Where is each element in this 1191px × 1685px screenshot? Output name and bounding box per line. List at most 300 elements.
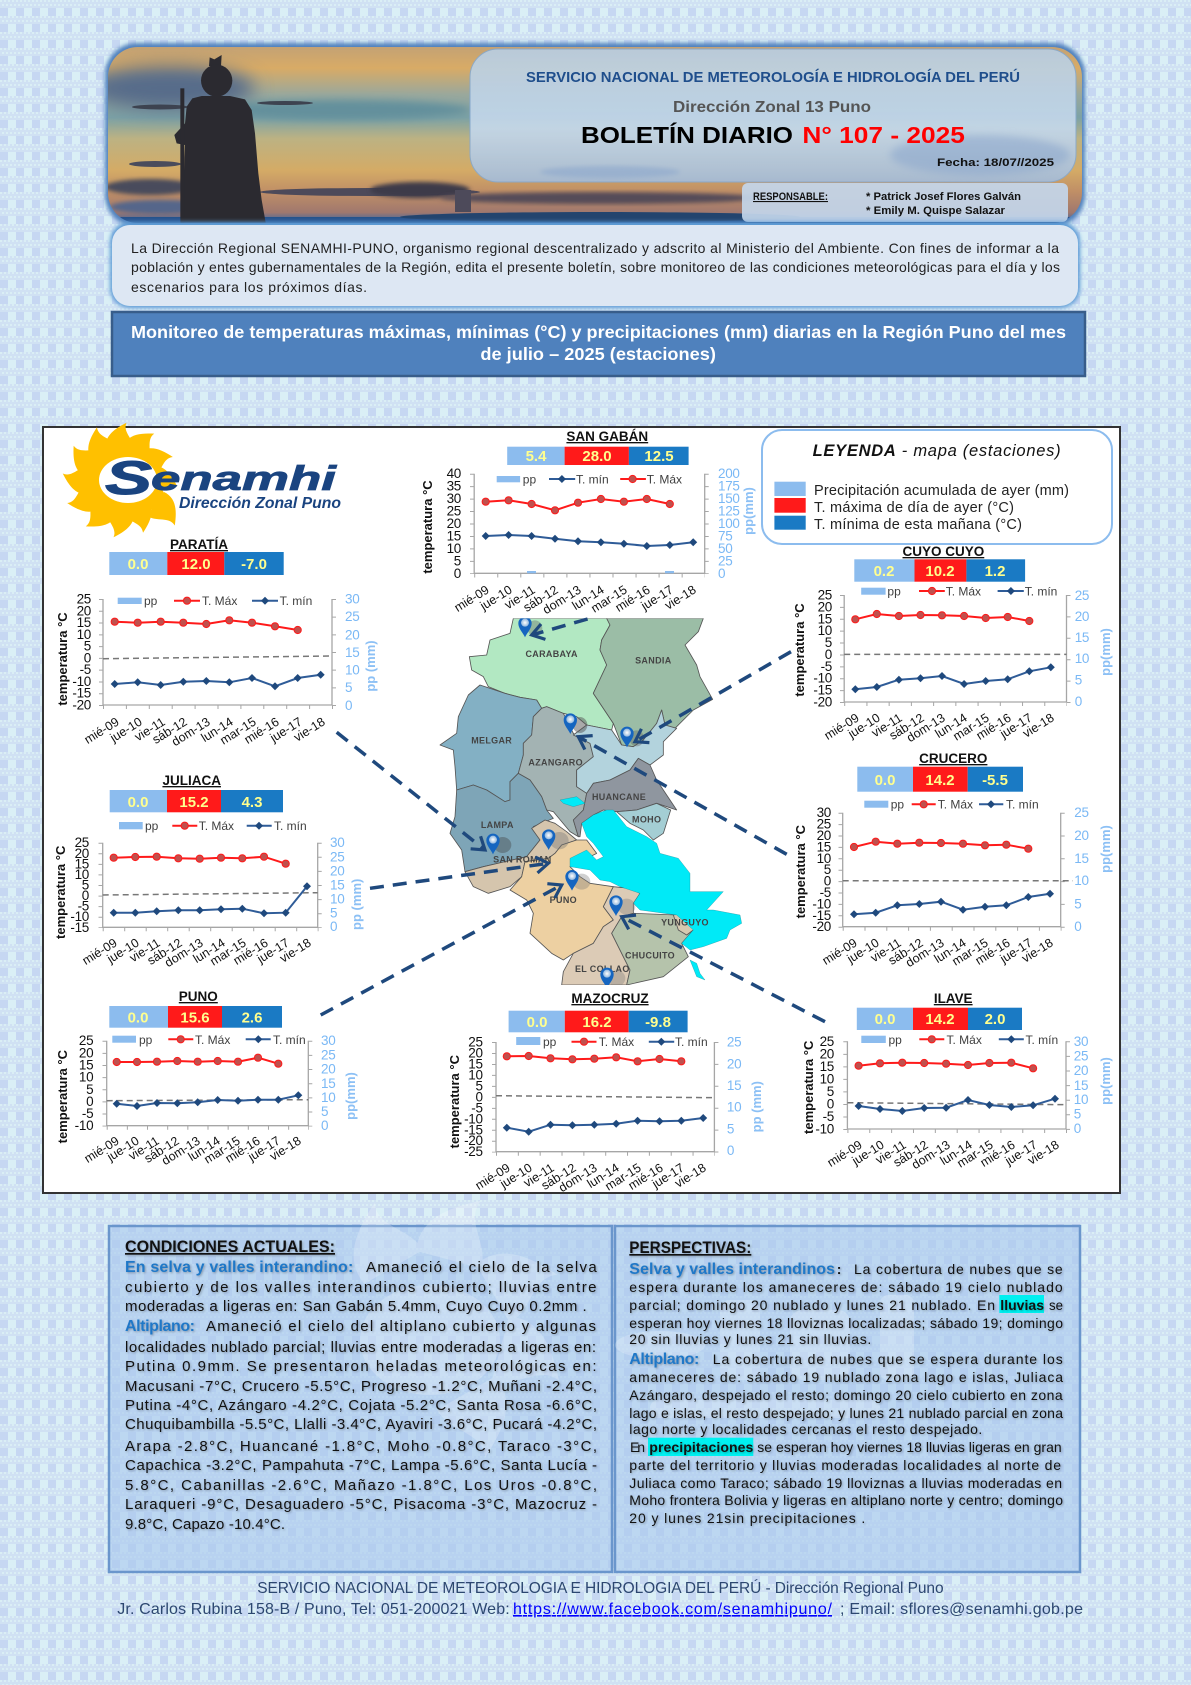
chart: Mazocruz: MAZOCRUZ <box>571 991 649 1006</box>
chart: San Gabán: 150 <box>718 491 740 506</box>
chart: Mazocruz: 15 <box>468 1056 483 1071</box>
chart: Crucero: 10 <box>817 851 831 866</box>
chart: Puno: dom-13 <box>159 1134 203 1168</box>
chart: Cuyo Cuyo: jue-10 <box>845 711 883 741</box>
chart: Paratía: pp (mm) <box>363 640 378 692</box>
chart: Mazocruz: -25 <box>464 1144 483 1159</box>
chart: Cuyo Cuyo: sáb-12 <box>887 711 927 743</box>
chart: Juliaca: mié-16 <box>231 936 271 968</box>
logo: Senamhi sun: enamhi <box>151 460 338 498</box>
chart: Ilave: -10 <box>815 1122 834 1136</box>
chart: Ilave: T. Máx <box>946 1033 982 1047</box>
chart: Mazocruz: 10 <box>727 1100 741 1114</box>
values: Paratía <box>109 552 284 575</box>
chart: Juliaca: T. mín <box>274 819 307 833</box>
chart: Crucero: 15 <box>817 839 831 854</box>
perspectivas text: 20 y lunes 21sin precipitaciones . <box>629 1510 865 1526</box>
section banner: de julio – 2025 (estaciones) <box>480 344 716 364</box>
chart: Paratía: mié-16 <box>242 715 282 747</box>
province labels: PUNO <box>550 895 577 905</box>
perspectivas text: Azángaro, despejado el resto; domingo 20 cielo cubierto en zona <box>629 1387 1063 1403</box>
chart: Ilave: dom-13 <box>909 1138 953 1172</box>
chart: Crucero: T. mín <box>1006 798 1039 812</box>
chart: Paratía: 10 <box>345 662 359 678</box>
chart: Cuyo Cuyo: mié-16 <box>974 711 1014 743</box>
chart: San Gabán: 25 <box>447 504 461 518</box>
legend box: LEYENDA - mapa (estaciones) <box>813 442 1061 460</box>
chart: Puno: 0 <box>86 1094 93 1109</box>
chart: Paratía: 5 <box>84 639 91 654</box>
chart: Ilave: mar-15 <box>955 1138 996 1171</box>
arrow: Puno to pin <box>321 885 562 1015</box>
chart: Mazocruz: 25 <box>468 1034 483 1050</box>
responsable box: * Patrick Josef Flores Galván <box>866 191 1021 203</box>
chart: Crucero: lun-14 <box>932 936 969 966</box>
chart: San Gabán: 10 <box>447 541 461 556</box>
intro text box: La Dirección Regional SENAMHI-PUNO, organismo regional descentralizado y adscrito al Ministerio del Ambiente. Con fines de informar a la <box>131 240 1059 256</box>
chart: Ilave: 15 <box>1074 1078 1088 1093</box>
condiciones text: moderadas a ligeras en: San Gabán 5.4mm, Cuyo Cuyo 0.2mm . <box>125 1298 587 1315</box>
perspectivas text: se <box>1049 1297 1063 1313</box>
chart: Crucero: dom-13 <box>903 936 947 970</box>
chart: Cuyo Cuyo: mié-09 <box>822 711 862 743</box>
chart: Mazocruz: T. mín <box>675 1035 708 1049</box>
chart: Paratía: -15 <box>72 686 91 701</box>
chart: San Gabán: mar-15 <box>589 583 630 616</box>
chart: San Gabán: pp <box>523 472 536 486</box>
perspectivas text: Altiplano: <box>629 1351 699 1368</box>
chart: Cuyo Cuyo: jue-17 <box>997 711 1035 741</box>
perspectivas text: se esperan hoy viernes 18 lluvias ligeras en gran <box>757 1439 1062 1455</box>
responsable box: * Emily M. Quispe Salazar <box>866 205 1006 217</box>
chart: Puno: 10 <box>321 1090 335 1105</box>
condiciones text: Laraqueri -9°C, Desaguadero -5°C, Pisacoma -3°C, Mazocruz - <box>125 1496 597 1513</box>
chart: Paratía: T. mín <box>280 594 312 608</box>
perspectivas text: Moho frontera Bolivia y ligeras en altiplano norte y centro; domingo <box>629 1492 1063 1508</box>
chart: San Gabán: 0 <box>718 566 725 581</box>
chart: Cuyo Cuyo: lun-14 <box>933 711 970 741</box>
intro text box: escenarios para los próximos días. <box>131 279 367 295</box>
chart: Juliaca: 30 <box>330 835 344 850</box>
values: Crucero: -5.5 <box>982 772 1008 789</box>
chart: San Gabán: 20 <box>447 516 461 531</box>
chart: Mazocruz: pp (mm) <box>749 1081 764 1132</box>
chart: San Gabán: temperatura °C <box>420 480 435 574</box>
chart: Puno: vie-18 <box>267 1134 304 1164</box>
chart: Puno: 10 <box>79 1070 93 1085</box>
chart: Juliaca: mié-09 <box>80 936 120 968</box>
chart: Ilave: 15 <box>820 1059 834 1074</box>
chart: Paratía: mar-15 <box>218 715 259 748</box>
province labels: AZANGARO <box>528 758 583 768</box>
chart: San Gabán: jue-17 <box>638 583 676 613</box>
chart: Ilave: 10 <box>1074 1092 1088 1107</box>
chart: Ilave: mié-09 <box>825 1138 865 1170</box>
condiciones text: Putina -4°C, Azángaro -4.2°C, Cojata -5.2°C, Santa Rosa -6.6°C, <box>125 1397 597 1414</box>
values: Ilave <box>857 1008 1022 1030</box>
condiciones text: Altiplano: <box>125 1318 195 1335</box>
chart: Ilave: 25 <box>820 1034 834 1049</box>
chart: Ilave: 25 <box>1074 1048 1088 1064</box>
chart: Ilave: -5 <box>823 1109 834 1124</box>
condiciones text: 5.8°C, Cabanillas -2.6°C, Mañazo -1.8°C, Los Uros -0.8°C, <box>125 1477 597 1494</box>
chart: Juliaca: pp (mm) <box>349 879 364 930</box>
chart: Mazocruz: 5 <box>727 1122 734 1136</box>
chart: Paratía: 20 <box>77 603 91 618</box>
condiciones text: Amaneció el cielo del altiplano cubierto y algunas <box>206 1318 596 1335</box>
chart: Puno: sáb-12 <box>142 1134 182 1166</box>
chart: Puno: -5 <box>82 1106 93 1121</box>
perspectivas text: amaneceres de: sábado 19 nublado zona lago e islas, Juliaca <box>629 1369 1063 1385</box>
chart: Puno <box>55 989 358 1168</box>
chart: Paratía: 5 <box>345 680 352 695</box>
chart: Paratía: 15 <box>345 645 359 660</box>
chart: Paratía: vie-11 <box>132 715 168 744</box>
chart: Mazocruz: pp <box>543 1035 557 1049</box>
chart: San Gabán: jue-10 <box>477 583 515 613</box>
chart: Ilave: T. mín <box>1026 1033 1058 1047</box>
chart: Mazocruz: mié-09 <box>473 1161 513 1193</box>
values: Cuyo Cuyo: 0.2 <box>874 563 894 580</box>
perspectivas text: esperan hoy viernes 18 lloviznas localizadas; sábado 19; domingo <box>629 1315 1063 1331</box>
chart: Mazocruz: 15 <box>727 1078 741 1093</box>
chart: San Gabán: 15 <box>447 528 461 544</box>
header title panel: BOLETÍN DIARIO <box>581 121 793 148</box>
chart: San Gabán: 0 <box>454 566 461 581</box>
chart: San Gabán: lun-14 <box>570 583 607 613</box>
perspectivas text: lago norte y localidades cercanas el resto despejado. <box>629 1421 982 1437</box>
chart: Paratía: jue-17 <box>267 715 305 745</box>
lake Titicaca <box>560 797 742 980</box>
chart: Crucero: 5 <box>824 862 831 877</box>
chart: Juliaca: 25 <box>75 835 89 850</box>
chart: San Gabán: vie-18 <box>662 583 699 613</box>
chart: Ilave: 5 <box>1074 1106 1081 1122</box>
chart: Puno: pp <box>139 1033 153 1047</box>
logo: Senamhi sun <box>63 423 341 537</box>
chart: San Gabán: 5 <box>454 553 461 568</box>
perspectivas text <box>629 1239 1063 1526</box>
chart: Ilave: jue-17 <box>1002 1138 1040 1168</box>
values: Paratía: -7.0 <box>241 556 267 573</box>
chart: Ilave: 0 <box>1074 1121 1081 1136</box>
chart: Juliaca: 10 <box>330 892 344 906</box>
legend box <box>762 430 1112 544</box>
chart: San Gabán: vie-11 <box>502 583 538 612</box>
chart: Crucero: 0 <box>1074 919 1082 934</box>
chart: Puno: T. mín <box>273 1033 306 1047</box>
chart: Ilave: ILAVE <box>934 991 973 1006</box>
chart: Cuyo Cuyo: 25 <box>1075 588 1089 603</box>
values: San Gabán: 12.5 <box>644 448 674 465</box>
chart: Juliaca: -15 <box>70 920 89 935</box>
cyan highlights <box>648 1295 1044 1456</box>
values: Juliaca: 0.0 <box>128 794 148 811</box>
chart: Cuyo Cuyo: -10 <box>813 671 832 686</box>
chart: Juliaca: sáb-12 <box>145 936 185 968</box>
chart: Cuyo Cuyo: CUYO CUYO <box>903 544 984 559</box>
chart: Cuyo Cuyo <box>792 544 1113 745</box>
chart: Paratía: 0 <box>345 698 352 713</box>
chart: Paratía: 0 <box>84 650 91 665</box>
chart: Paratía: 25 <box>345 609 359 624</box>
chart: Cuyo Cuyo: 15 <box>818 611 832 626</box>
values: Paratía: 12.0 <box>181 556 211 573</box>
footer <box>117 1580 1083 1618</box>
chart: Puno: 25 <box>321 1048 335 1062</box>
intro text box <box>110 222 1080 308</box>
chart: Ilave: 20 <box>820 1046 834 1061</box>
chart: Paratía: vie-18 <box>291 715 328 745</box>
chart: Mazocruz: jue-17 <box>649 1161 687 1191</box>
chart: Paratía: mié-09 <box>82 715 122 747</box>
chart: Crucero: pp <box>891 798 904 812</box>
chart: Paratía: lun-14 <box>199 715 236 745</box>
perspectivas text: espera durante los amaneceres de: sábado 19 cielo nublado <box>629 1279 1063 1295</box>
chart: Crucero: 30 <box>817 805 831 820</box>
chart: Cuyo Cuyo: pp(mm) <box>1098 628 1113 676</box>
chart: Crucero: -5 <box>820 885 831 900</box>
chart: Mazocruz: 10 <box>468 1067 483 1082</box>
chart: Mazocruz: -10 <box>464 1111 483 1126</box>
condiciones text: 9.8°C, Capazo -10.4°C. <box>125 1516 285 1533</box>
chart: Ilave: jue-10 <box>849 1138 887 1168</box>
arrow: Juliaca to pin <box>370 863 548 888</box>
perspectivas text: parte del territorio y lluvias moderadas localidades al norte de <box>629 1457 1061 1473</box>
chart: Juliaca: 10 <box>75 867 89 882</box>
values: Paratía: 0.0 <box>128 556 148 573</box>
province labels: MELGAR <box>471 736 512 746</box>
condiciones text: localidades nublado parcial; lluvias entre moderadas a ligeras en: <box>125 1339 596 1356</box>
chart: Puno: 5 <box>86 1082 93 1097</box>
legend box: T. mínima de esta mañana (°C) <box>814 517 1022 533</box>
chart: Juliaca: 5 <box>330 906 337 920</box>
footer: Jr. Carlos Rubina 158-B / Puno, Tel: 051-200021 Web: <box>117 1601 510 1618</box>
arrow: Crucero to pin <box>578 737 787 854</box>
panel watermark <box>331 1188 572 1466</box>
province labels: CHUCUITO <box>625 951 675 961</box>
chart: Cuyo Cuyo: vie-18 <box>1020 711 1057 741</box>
chart: Crucero: mié-16 <box>973 936 1013 968</box>
perspectivas watermark <box>615 1295 914 1418</box>
chart: Crucero: CRUCERO <box>919 751 987 766</box>
chart: Paratía: -10 <box>72 674 91 689</box>
chart: Crucero: sáb-12 <box>886 936 926 968</box>
chart: Crucero: pp(mm) <box>1098 825 1113 873</box>
header title panel <box>470 49 1076 182</box>
header sunset photo <box>85 47 1082 223</box>
chart: Cuyo Cuyo: -15 <box>813 683 832 698</box>
chart: Mazocruz: mié-16 <box>626 1161 666 1193</box>
chart: San Gabán: 30 <box>447 491 461 506</box>
chart: Mazocruz: T. Máx <box>599 1035 634 1049</box>
province labels: SANDIA <box>635 656 672 666</box>
header title panel: Dirección Zonal 13 Puno <box>673 99 871 116</box>
intro text box: población y entes gubernamentales de la Región, edita el presente boletín, sobre monitoreo de las condiciones meteorológicas para el día y los <box>131 259 1060 275</box>
chart: Crucero: 25 <box>817 817 831 832</box>
chart: Ilave: 0 <box>827 1096 834 1112</box>
chart: Juliaca: temperatura °C <box>53 845 68 939</box>
logo: Senamhi sun: S <box>105 451 152 504</box>
chart: Juliaca <box>53 773 364 970</box>
perspectivas text: La cobertura de nubes que se <box>854 1261 1063 1277</box>
chart: Crucero: 15 <box>1074 851 1089 866</box>
perspectivas text: : <box>837 1261 841 1277</box>
chart: Ilave: 30 <box>1074 1034 1088 1049</box>
condiciones text: CONDICIONES ACTUALES: <box>125 1237 335 1256</box>
header title panel: SERVICIO NACIONAL DE METEOROLOGÍA E HIDROLOGÍA DEL PERÚ <box>526 68 1020 86</box>
perspectivas text: 20 sin lluvias y lunes 21 sin lluvias. <box>629 1331 871 1347</box>
chart: Crucero: 25 <box>1074 805 1089 820</box>
chart: Puno: mar-15 <box>202 1134 243 1167</box>
chart: Crucero: -10 <box>812 896 831 911</box>
chart: Cuyo Cuyo: -5 <box>821 659 832 674</box>
chart: San Gabán: pp(mm) <box>741 487 756 535</box>
chart: Crucero: 10 <box>1074 873 1089 888</box>
logo: Senamhi sun: Dirección Zonal Puno <box>179 495 341 512</box>
chart: Cuyo Cuyo: T. Máx <box>946 584 981 598</box>
chart: Cuyo Cuyo: -20 <box>813 694 832 710</box>
responsable box: RESPONSABLE: <box>753 191 828 203</box>
chart: San Gabán: mié-16 <box>613 583 653 615</box>
panel: condiciones actuales <box>109 1188 612 1572</box>
chart: Juliaca: T. Máx <box>199 819 234 833</box>
province labels: HUANCANE <box>592 792 646 802</box>
chart: Juliaca: 5 <box>82 878 89 892</box>
chart: Cuyo Cuyo: dom-13 <box>904 711 948 745</box>
chart: Puno: T. Máx <box>195 1033 230 1047</box>
chart: Juliaca: jue-10 <box>104 936 142 966</box>
chart: Ilave: 5 <box>827 1084 834 1099</box>
chart: Juliaca: mar-15 <box>208 936 249 969</box>
chart: Cuyo Cuyo: temperatura °C <box>792 603 807 697</box>
chart: Crucero: -15 <box>812 908 831 923</box>
chart: San Gabán: 175 <box>718 479 740 494</box>
chart: Puno: pp(mm) <box>343 1072 358 1120</box>
chart: Mazocruz: 0 <box>727 1143 734 1158</box>
main monitoring panel <box>43 427 1120 1193</box>
chart: Crucero: vie-11 <box>868 936 904 965</box>
chart: Cuyo Cuyo: vie-11 <box>869 711 905 740</box>
chart: Mazocruz <box>447 991 764 1195</box>
chart: Crucero: T. Máx <box>938 798 973 812</box>
province labels: SAN ROMAN <box>493 854 552 864</box>
values: Juliaca: 4.3 <box>242 794 262 811</box>
values: Mazocruz <box>509 1011 688 1032</box>
chart: Juliaca: jue-17 <box>254 936 292 966</box>
chart: Puno: vie-11 <box>126 1134 162 1163</box>
arrow: San Gabán to pin <box>532 619 588 635</box>
chart: Juliaca: -10 <box>70 909 89 924</box>
chart: Juliaca: vie-18 <box>277 936 314 966</box>
condiciones text: Chuquibambilla -5.5°C, Llalli -3.4°C, Ayaviri -3.6°C, Pucará -4.2°C, <box>125 1416 597 1433</box>
chart: Paratía: -5 <box>80 662 91 677</box>
chart: Mazocruz: jue-10 <box>497 1161 535 1191</box>
chart: Cuyo Cuyo: 20 <box>1075 609 1089 624</box>
chart: Juliaca: 20 <box>75 846 89 861</box>
chart: Ilave: vie-11 <box>873 1138 909 1167</box>
header title panel: N° 107 - 2025 <box>802 122 965 148</box>
chart: Crucero: 20 <box>1074 828 1089 843</box>
chart: San Gabán: 125 <box>718 504 740 518</box>
chart: San Gabán: 50 <box>718 541 732 556</box>
chart: Puno: -10 <box>75 1118 93 1133</box>
condiciones text: Capachica -3.2°C, Pampahuta -7°C, Lampa -5.6°C, Santa Lucía - <box>125 1457 597 1474</box>
chart: Paratía: 25 <box>77 592 91 606</box>
chart: Puno: 15 <box>321 1076 335 1091</box>
chart: Cuyo Cuyo: T. mín <box>1025 584 1057 598</box>
chart: Paratía: 20 <box>345 628 359 642</box>
chart: San Gabán: sáb-12 <box>521 583 561 615</box>
values: San Gabán <box>507 447 689 465</box>
chart: Juliaca: 20 <box>330 864 344 878</box>
chart: Paratía: dom-13 <box>169 715 213 749</box>
provinces <box>440 618 713 985</box>
chart: Crucero: temperatura °C <box>793 824 808 918</box>
chart: Juliaca: dom-13 <box>162 936 206 970</box>
header title panel: Fecha: 18/07//2025 <box>937 157 1054 169</box>
values: Cuyo Cuyo: 1.2 <box>985 563 1005 580</box>
station pins <box>486 617 644 988</box>
values: Mazocruz: 16.2 <box>582 1014 612 1031</box>
values: Puno: 15.6 <box>180 1010 210 1026</box>
chart: Ilave: pp <box>888 1033 902 1047</box>
chart: Juliaca: lun-14 <box>191 936 228 966</box>
chart: Mazocruz: -20 <box>464 1133 483 1148</box>
chart: Mazocruz: 5 <box>475 1078 483 1093</box>
chart: Mazocruz: 0 <box>475 1089 483 1104</box>
chart: Crucero: jue-10 <box>844 936 882 966</box>
province labels <box>471 649 709 974</box>
chart: San Gabán: mié-09 <box>452 583 492 615</box>
chart: Crucero: 0 <box>824 874 831 889</box>
chart: Juliaca: 0 <box>330 919 337 934</box>
section banner <box>112 312 1085 376</box>
chart: Puno: 15 <box>79 1058 93 1072</box>
chart: Cuyo Cuyo: mar-15 <box>951 711 992 744</box>
chart: Cuyo Cuyo: 5 <box>1075 672 1082 688</box>
chart: Mazocruz: dom-13 <box>556 1161 600 1195</box>
perspectivas text: precipitaciones <box>649 1439 754 1455</box>
values: San Gabán: 28.0 <box>582 448 612 465</box>
header banner <box>85 43 1085 227</box>
values: Mazocruz: -9.8 <box>645 1014 671 1031</box>
chart: Cuyo Cuyo: 10 <box>1075 651 1089 666</box>
chart: Paratía: PARATÍA <box>170 537 228 552</box>
condiciones text: cubierto y de los valles interandinos cubierto; lluvias entre <box>125 1279 596 1296</box>
footer: SERVICIO NACIONAL DE METEOROLOGIA E HIDROLOGIA DEL PERÚ - Dirección Regional Puno <box>257 1580 944 1597</box>
values: San Gabán: 5.4 <box>526 448 547 465</box>
chart: Paratía: sáb-12 <box>150 715 190 747</box>
map: Región Puno provinces <box>440 617 742 988</box>
chart: Puno: mié-16 <box>223 1134 263 1166</box>
values: Cuyo Cuyo <box>854 559 1025 582</box>
province labels: MOHO <box>632 814 661 824</box>
chart: Paratía: jue-10 <box>107 715 145 745</box>
perspectivas text: En <box>630 1439 645 1455</box>
chart: Juliaca: vie-11 <box>127 936 163 965</box>
values: Juliaca <box>110 790 283 812</box>
chart: San Gabán: T. Máx <box>647 472 682 486</box>
chart: Puno: mié-09 <box>82 1134 122 1166</box>
perspectivas text: PERSPECTIVAS: <box>629 1239 751 1257</box>
chart: Mazocruz: sáb-12 <box>539 1161 579 1193</box>
chart: Mazocruz: -15 <box>464 1122 483 1137</box>
chart: Cuyo Cuyo: 5 <box>825 635 832 650</box>
chart: Mazocruz: -5 <box>471 1100 483 1115</box>
values: Ilave: 14.2 <box>925 1011 955 1028</box>
condiciones text: En selva y valles interandino: <box>125 1259 353 1276</box>
